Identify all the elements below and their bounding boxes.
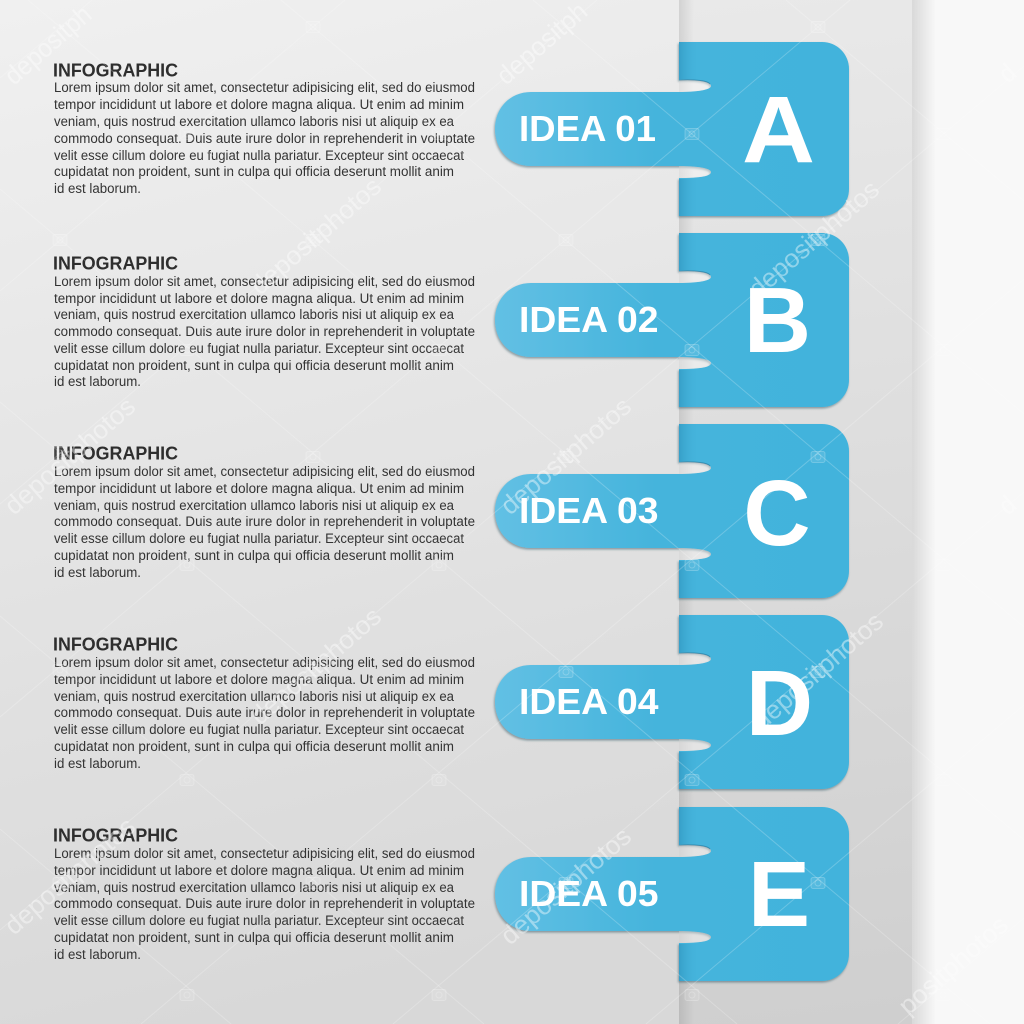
panel: middle paper — [679, 0, 912, 1024]
letter: B: B — [744, 268, 811, 372]
tab: B — [495, 233, 849, 407]
body: section 1: commodo consequat. Duis aute irure dolor in reprehenderit in voluptate — [54, 131, 475, 146]
letter: E: E — [748, 842, 810, 946]
body: section 3: veniam, quis nostrud exercitation ullamco laboris nisi ut aliquip ex ea — [54, 498, 454, 513]
body: section 2: tempor incididunt ut labore et dolore magna aliqua. Ut enim ad minim — [54, 291, 464, 306]
body: section 1: cupidatat non proident, sunt in culpa qui officia deserunt mollit anim — [54, 164, 454, 179]
body: section 2: id est laborum. — [54, 374, 141, 389]
letter: A: A — [742, 77, 815, 183]
body: section 1 — [54, 80, 475, 196]
body: section 5: id est laborum. — [54, 947, 141, 962]
tab: C — [495, 424, 849, 598]
body: section 5: commodo consequat. Duis aute irure dolor in reprehenderit in voluptate — [54, 896, 475, 911]
watermark text: depositphotos — [244, 601, 387, 731]
body: section 2: cupidatat non proident, sunt in culpa qui officia deserunt mollit anim — [54, 358, 454, 373]
body: section 3: commodo consequat. Duis aute irure dolor in reprehenderit in voluptate — [54, 514, 475, 529]
label: IDEA 04: IDEA 04 — [519, 681, 658, 722]
tab: E — [495, 807, 849, 981]
body: section 4: tempor incididunt ut labore et dolore magna aliqua. Ut enim ad minim — [54, 672, 464, 687]
heading: section 1: INFOGRAPHIC — [53, 60, 178, 80]
label: IDEA 05: IDEA 05 — [519, 873, 658, 914]
body: section 2: commodo consequat. Duis aute irure dolor in reprehenderit in voluptate — [54, 324, 475, 339]
body: section 4: veniam, quis nostrud exercitation ullamco laboris nisi ut aliquip ex ea — [54, 689, 454, 704]
watermark text: depositphotos — [742, 174, 885, 304]
text block: section 4 — [53, 634, 475, 771]
body: section 4: Lorem ipsum dolor sit amet, consectetur adipisicing elit, sed do eiusmod — [54, 655, 475, 670]
heading: section 3: INFOGRAPHIC — [53, 444, 178, 464]
label: IDEA 01: IDEA 01 — [519, 108, 656, 149]
watermark text: d — [992, 57, 1022, 89]
tab: A — [495, 42, 849, 216]
body: section 4 — [54, 655, 475, 771]
watermark text: depositphotos — [494, 391, 637, 521]
watermark text: d — [992, 489, 1022, 521]
panel: left paper — [0, 0, 679, 1024]
body: section 2: Lorem ipsum dolor sit amet, consectetur adipisicing elit, sed do eiusmod — [54, 274, 475, 289]
body: section 3: tempor incididunt ut labore et dolore magna aliqua. Ut enim ad minim — [54, 481, 464, 496]
letter: D: D — [746, 651, 813, 755]
letter: C: C — [743, 461, 811, 565]
body: section 5 — [54, 846, 475, 962]
watermark text: depositphotos — [494, 821, 637, 951]
watermark text: depositphotos — [0, 811, 141, 941]
heading: section 2: INFOGRAPHIC — [53, 254, 178, 274]
body: section 3 — [54, 464, 475, 580]
body: section 1: id est laborum. — [54, 181, 141, 196]
body: section 3: id est laborum. — [54, 565, 141, 580]
shadow: middle panel edge — [912, 0, 936, 1024]
body: section 1: veniam, quis nostrud exercitation ullamco laboris nisi ut aliquip ex ea — [54, 114, 454, 129]
body: section 5: Lorem ipsum dolor sit amet, consectetur adipisicing elit, sed do eiusmod — [54, 846, 475, 861]
body: section 4: id est laborum. — [54, 756, 141, 771]
body: section 3: velit esse cillum dolore eu fugiat nulla pariatur. Excepteur sint occaecat — [54, 531, 464, 546]
label: IDEA 03: IDEA 03 — [519, 490, 658, 531]
label: IDEA 02: IDEA 02 — [519, 299, 658, 340]
body: section 1: velit esse cillum dolore eu fugiat nulla pariatur. Excepteur sint occaecat — [54, 148, 464, 163]
body: section 4: commodo consequat. Duis aute irure dolor in reprehenderit in voluptate — [54, 705, 475, 720]
heading: section 4: INFOGRAPHIC — [53, 634, 178, 654]
watermark text: depositphotos — [0, 391, 141, 521]
heading: section 5: INFOGRAPHIC — [53, 826, 178, 846]
body: section 5: velit esse cillum dolore eu fugiat nulla pariatur. Excepteur sint occaecat — [54, 913, 464, 928]
body: section 1: tempor incididunt ut labore et dolore magna aliqua. Ut enim ad minim — [54, 97, 464, 112]
body: section 2: veniam, quis nostrud exercitation ullamco laboris nisi ut aliquip ex ea — [54, 307, 454, 322]
shadow: left paper edge — [679, 0, 694, 1024]
text block: section 1 — [53, 60, 475, 196]
body: section 5: veniam, quis nostrud exercitation ullamco laboris nisi ut aliquip ex ea — [54, 880, 454, 895]
text block: section 3 — [53, 444, 475, 580]
body: section 3: Lorem ipsum dolor sit amet, consectetur adipisicing elit, sed do eiusmod — [54, 464, 475, 479]
body: section 4: velit esse cillum dolore eu fugiat nulla pariatur. Excepteur sint occaecat — [54, 722, 464, 737]
panel: right margin — [912, 0, 1024, 1024]
watermark text: depositphotos — [746, 606, 889, 736]
watermark text: positphotos — [892, 909, 1014, 1021]
watermark text: depositphotos — [244, 171, 387, 301]
text block: section 2 — [53, 254, 475, 389]
body: section 2 — [54, 274, 475, 389]
body: section 3: cupidatat non proident, sunt in culpa qui officia deserunt mollit anim — [54, 548, 454, 563]
body: section 2: velit esse cillum dolore eu fugiat nulla pariatur. Excepteur sint occaecat — [54, 341, 464, 356]
body: section 5: cupidatat non proident, sunt in culpa qui officia deserunt mollit anim — [54, 930, 454, 945]
body: section 5: tempor incididunt ut labore et dolore magna aliqua. Ut enim ad minim — [54, 863, 464, 878]
text block: section 5 — [53, 826, 475, 962]
body: section 1: Lorem ipsum dolor sit amet, consectetur adipisicing elit, sed do eiusmod — [54, 80, 475, 95]
body: section 4: cupidatat non proident, sunt in culpa qui officia deserunt mollit anim — [54, 739, 454, 754]
tab: D — [495, 615, 849, 789]
